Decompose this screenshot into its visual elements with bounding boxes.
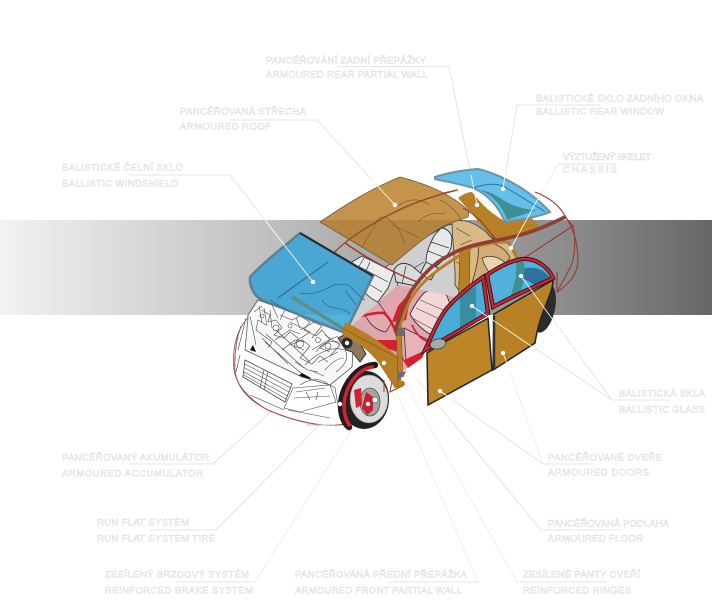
- label: hinges: [523, 570, 640, 596]
- label: windshield: BALISTICKÉ ČELNÍ SKLO: [62, 162, 183, 174]
- label: rear window: [536, 94, 704, 118]
- front door glass: [425, 277, 488, 350]
- centre pillar: [458, 248, 470, 310]
- engine bay: [245, 300, 366, 385]
- thin curve on rear wall: [463, 208, 495, 238]
- grey gradient band: [0, 220, 712, 315]
- label: hinges: ZESÍLENÉ PANTY DVEŘÍ: [523, 570, 640, 580]
- label: rear partial wall: [266, 56, 428, 80]
- front bumper and grille: [234, 318, 345, 425]
- label: accumulator: [62, 452, 209, 480]
- label: run flat: [97, 518, 215, 544]
- label: brake system: [105, 570, 253, 596]
- label: floor: ARMOURED FLOOR: [548, 534, 643, 544]
- rear tyre: [528, 281, 560, 335]
- label underlines: [129, 66, 670, 582]
- rear body thin outline: [433, 190, 578, 292]
- label: doors: PANCÉŘOVANÉ DVEŘE: [548, 452, 662, 464]
- leader lines on white background: [129, 66, 670, 582]
- label: rear window: BALLISTIC REAR WINDOW: [536, 106, 664, 118]
- rear window glass: [435, 169, 550, 222]
- seat and dash red curve: [345, 243, 420, 283]
- label: ballistic glass: [619, 388, 706, 416]
- rear partial wall: [458, 192, 540, 240]
- label: roof: [180, 106, 307, 132]
- label: doors: ARMOURED DOORS: [548, 468, 649, 478]
- label: front partial wall: [295, 570, 468, 596]
- roof panel: [320, 177, 469, 265]
- label: front partial wall: ARMOURED FRONT PARTIAL WALL: [295, 586, 462, 596]
- label: doors: [548, 452, 662, 478]
- pink lower interior: [352, 285, 455, 372]
- label: roof: ARMOURED ROOF: [180, 122, 271, 132]
- label: windshield: BALLISTIC WINDSHIELD: [62, 178, 178, 190]
- label: chassis: [563, 152, 651, 176]
- tan rear seats: [452, 220, 518, 300]
- door seam: [493, 316, 495, 370]
- label: accumulator: ARMOURED ACCUMULATOR: [62, 468, 203, 480]
- interior base: [345, 222, 518, 370]
- wing mirror: [429, 338, 447, 350]
- front wheel and brake: [338, 365, 392, 431]
- fender red arc: [341, 365, 375, 427]
- accumulator: [338, 334, 366, 362]
- label: brake system: REINFORCED BRAKE SYSTEM: [105, 586, 253, 596]
- roof seat shadow lines: [362, 200, 462, 248]
- label: ballistic glass: BALISTICKÁ SKLA: [619, 388, 706, 400]
- sill red triangles: [384, 372, 405, 392]
- rear door: [493, 280, 553, 370]
- front door: [427, 318, 492, 405]
- label: rear partial wall: PANCÉŘOVÁNÍ ZADNÍ PŘEPÁŽKY: [266, 56, 427, 66]
- leader lines over the car: [265, 175, 553, 400]
- car illustration: [234, 169, 578, 431]
- label: brake system: ZESÍLENÝ BRZDOVÝ SYSTÉM: [105, 570, 249, 580]
- label: floor: PANCÉŘOVANÁ PODLAHA: [548, 518, 670, 530]
- marker dots: [311, 187, 523, 406]
- label: chassis: VÝZTUŽENÝ SKELET: [563, 152, 651, 163]
- windshield: [250, 233, 373, 333]
- label: chassis: CHASSIS: [563, 164, 617, 176]
- label: front partial wall: PANCÉŘOVANÁ PŘEDNÍ PŘEPÁŽKA: [295, 570, 468, 580]
- label: accumulator: PANCÉŘOVANÝ AKUMULÁTOR: [62, 452, 209, 464]
- roof rail red line: [330, 190, 457, 257]
- orange front partial wall and pillar: [342, 316, 405, 390]
- label: run flat: RUN FLAT SYSTEM TIRE: [97, 534, 215, 544]
- label: rear partial wall: ARMOURED REAR PARTIAL WALL: [266, 70, 428, 80]
- grey seats upper: [352, 228, 452, 310]
- roof rail dark red: [395, 217, 565, 332]
- label: ballistic glass: BALLISTIC GLASS: [619, 404, 705, 416]
- label: roof: PANCÉŘOVANÁ STŘECHA: [180, 106, 307, 118]
- roof rail orange: [402, 242, 518, 322]
- rear door glass: [487, 259, 553, 307]
- label: floor: [548, 518, 670, 544]
- label: rear window: BALISTICKÉ SKLO ZADNÍHO OKNA: [536, 94, 704, 104]
- label: hinges: REINFORCED HINGES: [523, 586, 631, 596]
- label: windshield: [62, 162, 183, 190]
- label: run flat: RUN FLAT SYSTÉM: [97, 518, 189, 528]
